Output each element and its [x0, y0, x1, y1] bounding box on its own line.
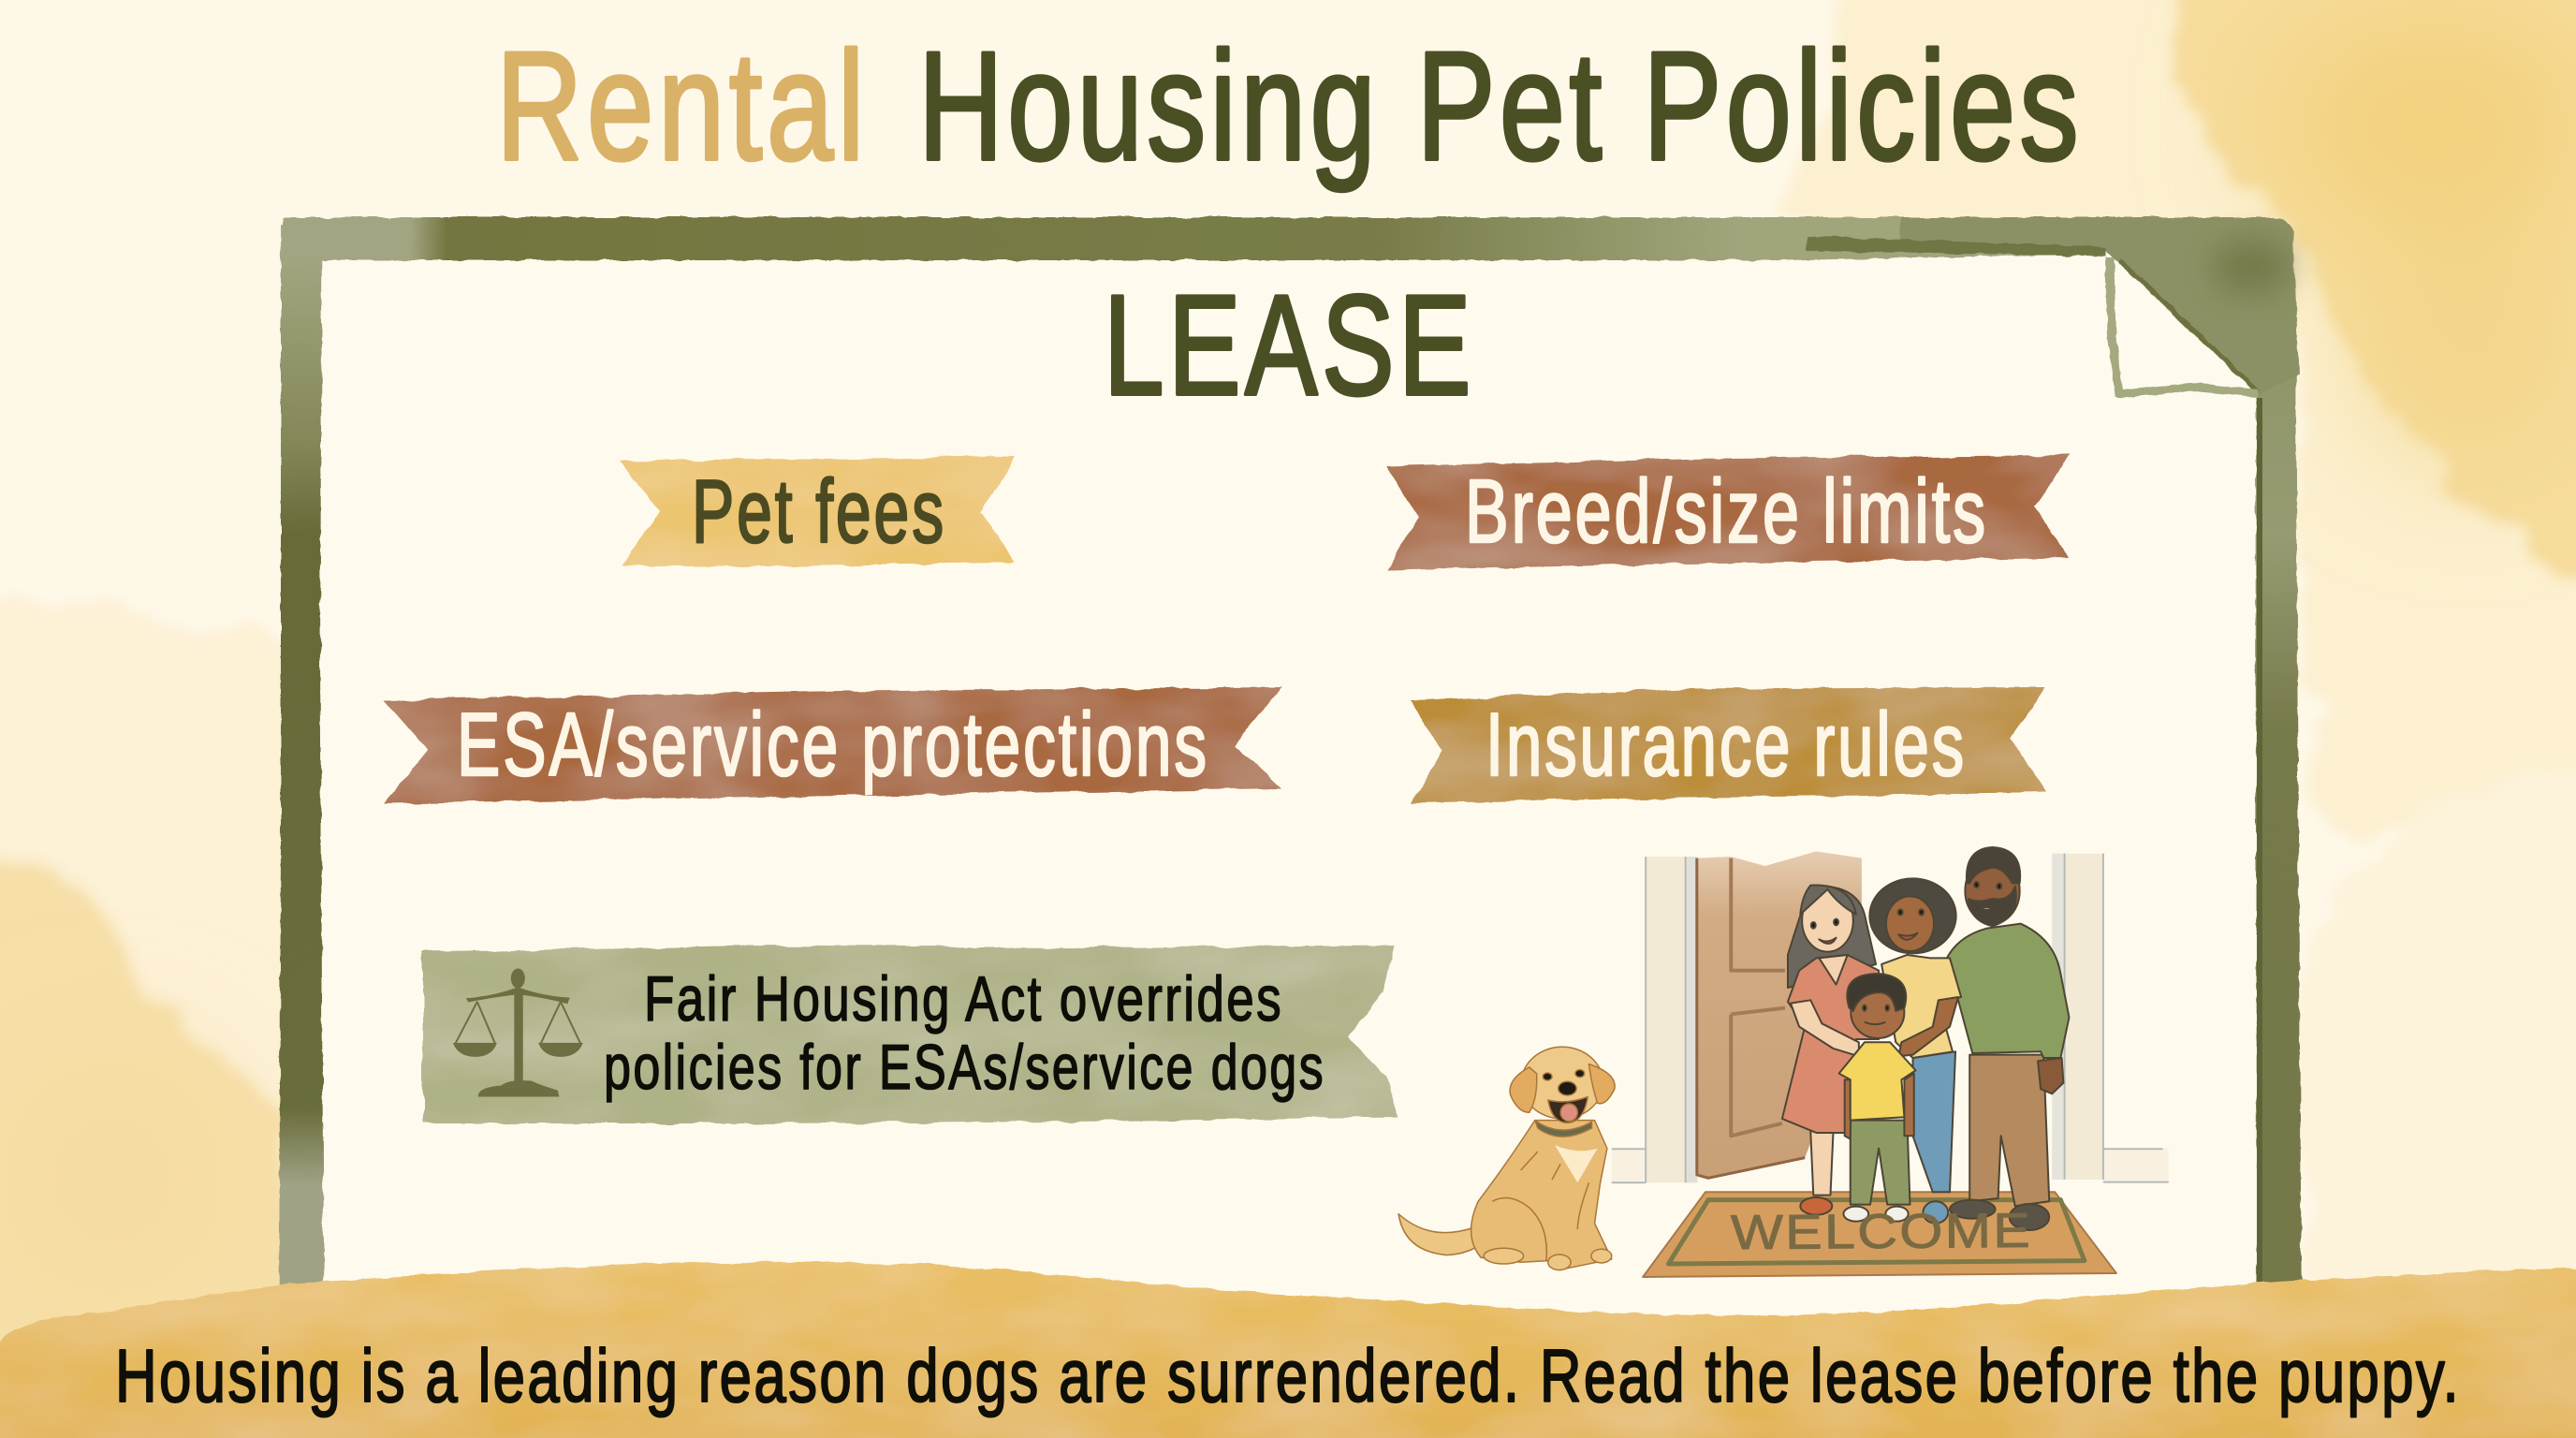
title	[496, 20, 2083, 192]
banner: insurance rules: Insurance rules	[1486, 695, 1967, 795]
panel: lease document with olive frame	[279, 217, 2302, 1329]
banner: ESA and service protections	[383, 687, 1281, 803]
woman with long hair in coral dress	[1782, 886, 1879, 1215]
frame: dark top stroke	[1807, 236, 2106, 257]
title: Rental	[496, 20, 869, 192]
frame: right edge dark inner stroke	[2257, 398, 2262, 1329]
banner: pet fees	[620, 457, 1016, 566]
man	[1947, 847, 2069, 1230]
callout: Fair Housing Act: Fair Housing Act overrides	[644, 963, 1283, 1034]
frame: folded corner shadow stroke	[2120, 260, 2258, 391]
lease heading: LEASE	[1104, 266, 1475, 425]
frame: left edge	[279, 221, 324, 1329]
title: Housing Pet Policies	[918, 20, 2083, 192]
woman with dark curly hair	[1869, 878, 1961, 1224]
footer band	[0, 1261, 2576, 1438]
dog	[1398, 1047, 1615, 1270]
callout: Fair Housing Act	[423, 946, 1398, 1123]
door frame and wall	[1612, 854, 2169, 1182]
callout: Fair Housing Act: policies for ESAs/service dogs	[604, 1032, 1325, 1103]
frame: top edge	[283, 217, 2106, 262]
icon: balance scales	[454, 969, 582, 1096]
welcome mat lettering: WELCOME	[1731, 1204, 2032, 1260]
welcome mat	[1643, 1192, 2116, 1277]
banner: insurance rules	[1410, 687, 2045, 803]
banner: breed and size limits: Breed/size limits	[1465, 462, 1988, 562]
paper sheet	[309, 243, 2265, 1329]
banner: ESA and service protections: ESA/service protections	[457, 695, 1209, 795]
child in yellow shirt	[1839, 974, 1916, 1222]
frame: corner dark bloom	[2212, 239, 2291, 295]
banner: pet fees: Pet fees	[692, 462, 946, 562]
open door	[1697, 851, 1862, 1178]
banner: breed and size limits	[1385, 455, 2070, 570]
frame: right edge	[2256, 337, 2302, 1329]
illustration: family at the front door on a welcome mat	[1398, 847, 2169, 1277]
frame: top right folded corner	[1900, 217, 2299, 395]
frame: folded flap outline	[2110, 257, 2258, 394]
